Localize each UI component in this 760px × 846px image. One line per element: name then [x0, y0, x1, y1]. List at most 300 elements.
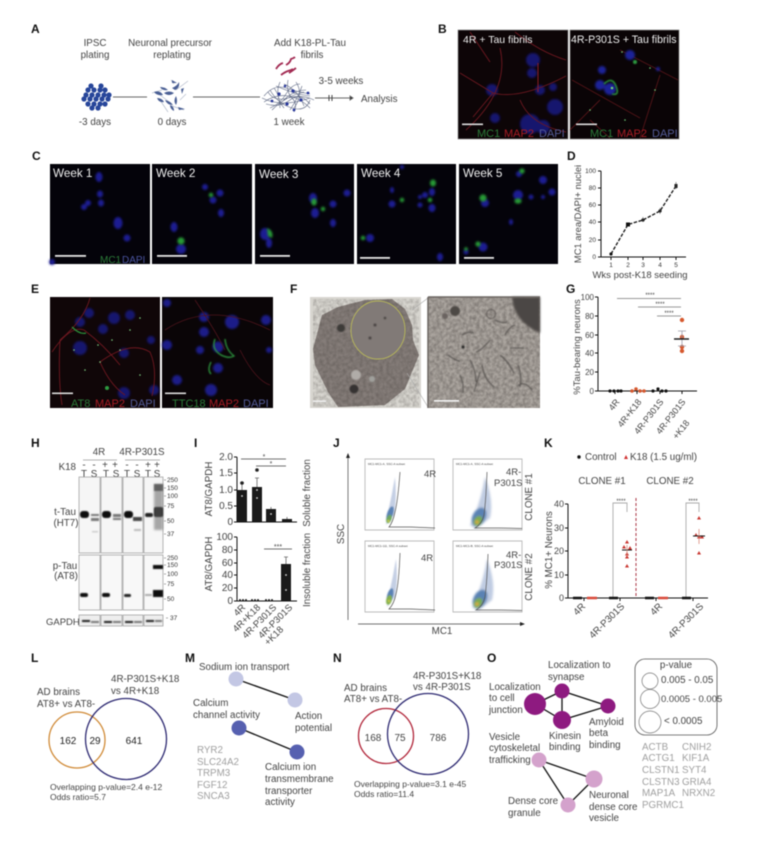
- chart: insoluble fraction: [204, 532, 313, 648]
- panel O: enrichment network and legend: [487, 651, 722, 824]
- label G: G: [566, 282, 575, 296]
- term labels: trafficking: [489, 755, 531, 766]
- caption: MAP2: [209, 398, 239, 410]
- caption: DAPI: [539, 128, 565, 140]
- gene list: CLSTN1: [642, 765, 680, 776]
- clone headings: CLONE #2: [646, 476, 694, 487]
- set labels: AD brains: [344, 683, 387, 694]
- blot header: +: [102, 460, 108, 471]
- micrograph: week 1: Week 1: [53, 167, 92, 180]
- term labels: Amyloid: [589, 717, 624, 728]
- micrograph: 4R-P301S + Tau fibrils: [570, 30, 679, 140]
- statistics: Odds ratio=5.7: [50, 792, 106, 802]
- caption: MC1: [477, 128, 500, 140]
- tick labels: [554, 499, 564, 603]
- tick labels: 100: [581, 293, 595, 302]
- blot: t-Tau (HT7): [53, 477, 163, 553]
- blot header: T: [81, 469, 87, 480]
- label C: C: [32, 149, 41, 163]
- axis titles: Wks post-K18 seeding: [592, 270, 688, 281]
- venn counts: 168: [365, 733, 382, 744]
- blot: GAPDH: [46, 615, 163, 628]
- gene list: SLC24A2: [197, 757, 239, 768]
- panel J: flow cytometry plots: [333, 436, 535, 637]
- category labels: 4R: [648, 601, 665, 618]
- chart: insoluble fraction: 60: [222, 558, 233, 569]
- tick labels: 80: [589, 185, 596, 192]
- molecular weight markers: 250: [167, 555, 178, 562]
- blot header: S: [134, 469, 141, 480]
- term labels: binding: [589, 740, 621, 751]
- flow plot: 4R clone 1: [365, 459, 436, 530]
- venn counts: [365, 733, 447, 744]
- term labels: Kinesin: [549, 731, 581, 742]
- molecular weight markers: 100: [167, 493, 178, 500]
- gene list: FGF12: [197, 780, 228, 791]
- gene list: [197, 745, 239, 802]
- label M: M: [185, 651, 195, 665]
- micrograph: week 1: MC1: [100, 255, 122, 266]
- step labels: Add K18-PL-Tau: [274, 38, 346, 49]
- chart: insoluble fraction: Insoluble fraction: [302, 533, 313, 607]
- panel F: electron micrographs: [290, 282, 540, 408]
- tick labels: 1: [609, 262, 613, 269]
- tick labels: 100: [585, 168, 596, 175]
- blot: p-Tau (AT8): p-Tau: [53, 561, 77, 572]
- term labels: channel activity: [193, 710, 260, 721]
- step labels: 1 week: [273, 117, 305, 128]
- blot header: [59, 447, 165, 480]
- clone headings: [578, 476, 694, 487]
- caption: MAP2: [95, 398, 125, 410]
- blot: p-Tau (AT8): [53, 555, 163, 610]
- venn counts: 786: [430, 733, 447, 744]
- flow plot: 4R clone 2: MC1-MC1-111, SSC-A subset: [368, 544, 408, 548]
- gene list: SNCA3: [197, 791, 230, 802]
- chart: soluble fraction: 1.0: [219, 485, 233, 496]
- caption: AT8: [71, 398, 90, 410]
- blot header: +: [112, 460, 118, 471]
- term labels: granule: [508, 808, 541, 819]
- blot header: K18: [59, 462, 77, 473]
- chart: insoluble fraction: 20: [222, 583, 233, 594]
- term labels: Action: [295, 711, 322, 722]
- blot header: +: [145, 460, 151, 471]
- panel I: AT8/GAPDH bar charts: [194, 436, 313, 648]
- significance brackets: ****: [616, 499, 626, 505]
- flow plot: 4R-P301S clone 1: MC1-MC1-A, SSC-A subset: [456, 462, 493, 466]
- electron micrograph: fibril detail: [428, 297, 540, 408]
- tick labels: 60: [585, 331, 595, 340]
- caption: [52, 392, 156, 410]
- caption: MAP2: [504, 128, 534, 140]
- label H: H: [31, 436, 40, 450]
- set labels: AT8+ vs AT8-: [344, 694, 402, 705]
- axis titles: MC1 area/DAPI+ nuclei: [572, 165, 583, 263]
- chart: insoluble fraction: 4R-P301S: [256, 602, 295, 641]
- blot header: T: [124, 469, 130, 480]
- tick labels: 0: [592, 254, 596, 261]
- blot header: T: [145, 469, 151, 480]
- label O: O: [487, 651, 496, 665]
- axis titles: [572, 165, 688, 281]
- legend: Control: [585, 452, 617, 463]
- chart: insoluble fraction: 100: [216, 532, 233, 543]
- molecular weight markers: 250: [167, 477, 178, 484]
- caption: TTC18: [172, 398, 206, 410]
- caption: MC1: [590, 128, 613, 140]
- caption: DAPI: [652, 128, 678, 140]
- micrograph: week 2: [152, 164, 252, 264]
- term labels: Calcium: [193, 698, 228, 709]
- network edges: [535, 691, 608, 805]
- step labels: [79, 38, 398, 128]
- axes: [565, 504, 708, 601]
- chart: soluble fraction: *: [263, 454, 266, 461]
- chart: insoluble fraction: 80: [222, 545, 233, 556]
- term labels: transporter: [265, 786, 313, 797]
- chart: insoluble fraction: 40: [222, 570, 233, 581]
- caption: DAPI: [130, 398, 156, 410]
- step labels: Neuronal precursor: [128, 38, 213, 49]
- chart: soluble fraction: [204, 452, 313, 528]
- tick labels: 40: [585, 349, 595, 358]
- term labels: [193, 662, 334, 808]
- molecular weight markers: 37: [167, 531, 175, 538]
- step labels: Analysis: [361, 94, 398, 105]
- molecular weight markers: 75: [167, 581, 175, 588]
- chart: insoluble fraction: +K18: [262, 624, 286, 648]
- gene list: MAP1A: [642, 788, 676, 799]
- flow plot: 4R-P301S clone 2: P301S: [494, 560, 523, 571]
- term labels: cytoskeletal: [489, 743, 540, 754]
- blot header: -: [92, 460, 96, 471]
- clone labels: CLONE #2: [524, 553, 535, 601]
- molecular weight markers: 37: [170, 615, 178, 622]
- term labels: Calcium ion: [265, 762, 316, 773]
- panel E: AT8 and TTC18 micrographs: [31, 282, 273, 410]
- gene list: [642, 742, 715, 811]
- panel C: time course micrographs: [32, 149, 558, 266]
- significance bars: ****: [664, 311, 674, 317]
- chart: insoluble fraction: 4R: [232, 602, 248, 619]
- blot header: 4R: [93, 447, 105, 458]
- label L: L: [31, 651, 38, 665]
- clone divider: [635, 498, 637, 598]
- p-value legend: [635, 659, 722, 735]
- micrograph: 4R + Tau fibrils: [458, 30, 568, 140]
- flow plot: 4R-P301S clone 2: [453, 541, 523, 612]
- micrograph: TTC18: [162, 297, 273, 410]
- chart: soluble fraction: 2.0: [219, 452, 233, 463]
- category labels: 4R-P301S: [666, 601, 706, 641]
- step labels: -3 days: [79, 117, 111, 128]
- molecular weight markers: 150: [167, 562, 178, 569]
- tick labels: [581, 293, 595, 396]
- set labels: vs 4R+K18: [111, 686, 160, 697]
- category labels: [607, 397, 692, 441]
- venn counts: [60, 736, 143, 747]
- micrograph: week 2: Week 2: [156, 167, 195, 180]
- tick labels: 3: [641, 262, 645, 269]
- set labels: 4R-P301S+K18: [111, 674, 180, 685]
- chart: soluble fraction: 1.5: [219, 468, 233, 479]
- icon: tau fibrils: [276, 57, 296, 75]
- network edges: [236, 679, 297, 752]
- axes: [598, 171, 686, 260]
- label A: A: [31, 22, 40, 36]
- gene list: CLSTN3: [642, 777, 680, 788]
- term labels: Dense core: [508, 796, 559, 807]
- blot: p-Tau (AT8): (AT8): [54, 571, 78, 582]
- flow plot: 4R-P301S clone 1: P301S: [494, 478, 523, 489]
- axes arrows and titles: [336, 453, 525, 637]
- statistics: [354, 779, 466, 799]
- micrograph: week 3: Week 3: [259, 168, 298, 181]
- data points: [573, 516, 705, 598]
- network nodes: purple cluster: [524, 684, 616, 729]
- blot header: S: [91, 469, 98, 480]
- molecular weight markers: 50: [167, 596, 175, 603]
- axes arrows and titles: SSC: [336, 524, 347, 544]
- term labels: vesicle: [589, 813, 619, 824]
- gene list: SYT4: [682, 765, 707, 776]
- tick labels: 4: [658, 262, 662, 269]
- panel B: tau fibril immunostaining: [438, 22, 679, 140]
- chart: insoluble fraction: 0: [227, 596, 233, 607]
- panel A: experimental timeline: [31, 22, 398, 128]
- molecular weight markers: 50: [167, 518, 175, 525]
- set labels: AD brains: [37, 687, 80, 698]
- icon: neuron network: [262, 80, 314, 112]
- axes: [595, 297, 697, 394]
- significance bars: ****: [645, 293, 655, 299]
- set labels: 4R-P301S+K18: [413, 671, 482, 682]
- chart: insoluble fraction: 4R-P301S: [240, 602, 279, 641]
- caption: 4R + Tau fibrils: [463, 34, 533, 46]
- statistics: Overlapping p-value=3.1 e-45: [354, 779, 466, 789]
- arrows between steps: [113, 95, 353, 101]
- panel L: Venn diagram: [31, 651, 180, 802]
- chart: soluble fraction: 0: [227, 517, 233, 528]
- gene list: ACTB: [642, 742, 669, 753]
- term labels: transmembrane: [265, 774, 334, 785]
- icon: neuronal precursor cells: [152, 80, 188, 112]
- blot header: T: [103, 469, 109, 480]
- term labels: activity: [265, 797, 295, 808]
- panel D: MC1 area line chart: [567, 149, 688, 281]
- label E: E: [31, 282, 39, 296]
- label J: J: [333, 436, 340, 450]
- molecular weight markers: [164, 477, 178, 622]
- tick labels: 0: [559, 593, 564, 603]
- gene list: CNIH2: [682, 742, 711, 753]
- gene list: RYR2: [197, 745, 223, 756]
- term labels: Vesicle: [489, 732, 521, 743]
- set labels: AT8+ vs AT8-: [37, 699, 95, 710]
- gene list: GRIA4: [682, 777, 712, 788]
- term labels: dense core: [589, 802, 638, 813]
- icon: iPSC cell cluster: [81, 83, 112, 111]
- label D: D: [567, 149, 576, 163]
- chart: insoluble fraction: AT8/GAPDH: [204, 537, 215, 591]
- tick labels: 10: [554, 570, 564, 580]
- molecular weight markers: 75: [167, 503, 175, 510]
- category labels: [571, 601, 706, 641]
- tick labels: [585, 168, 678, 269]
- blot header: -: [125, 460, 129, 471]
- flow plot: 4R-P301S clone 1: [453, 459, 523, 530]
- molecular weight markers: 100: [167, 571, 178, 578]
- micrograph: week 1: [49, 164, 150, 266]
- blot: GAPDH: GAPDH: [46, 617, 80, 628]
- micrograph: week 3: [255, 164, 354, 264]
- micrograph: week 5: [459, 164, 558, 264]
- category labels: 4R-P301S: [632, 397, 666, 436]
- gene list: PGRMC1: [642, 800, 684, 811]
- electron micrograph: whole cell: [310, 297, 421, 408]
- network nodes: pink cluster: [532, 752, 602, 812]
- venn counts: 641: [126, 736, 143, 747]
- statistics: [50, 782, 162, 802]
- flow plot: 4R clone 1: MC1-MC1-A, SSC-A subset: [368, 462, 405, 466]
- tick labels: 20: [585, 368, 595, 377]
- term labels: beta: [589, 728, 609, 739]
- blot header: -: [135, 460, 139, 471]
- significance brackets: ****: [688, 499, 698, 505]
- blot header: S: [154, 469, 161, 480]
- micrograph: week 5: Week 5: [463, 167, 503, 180]
- panel G: tau-bearing neurons scatter: [566, 282, 697, 441]
- venn circles: [49, 698, 166, 780]
- label N: N: [333, 651, 342, 665]
- gene list: ACTG1: [642, 753, 675, 764]
- micrograph: week 4: Week 4: [361, 167, 401, 180]
- tick labels: 40: [554, 499, 564, 509]
- legend: [577, 452, 697, 463]
- panel K: percent MC1 positive neurons: [544, 436, 708, 641]
- chart: soluble fraction: *: [270, 461, 273, 468]
- legend: K18 (1.5 ug/ml): [630, 452, 697, 463]
- flow plot: 4R clone 1: 4R: [424, 469, 436, 480]
- y axis title: % MC1+ Neurons: [544, 511, 555, 589]
- caption: [571, 34, 678, 140]
- network nodes: [228, 672, 304, 760]
- significance brackets: [613, 499, 699, 598]
- chart: insoluble fraction: ***: [274, 544, 282, 551]
- y axis title: %Tau-bearing neurons: [572, 299, 583, 395]
- category labels: 4R-P301S: [587, 601, 627, 641]
- blot: t-Tau (HT7): (HT7): [53, 518, 79, 529]
- flow plot: 4R-P301S clone 1: 4R-: [506, 467, 521, 478]
- label B: B: [438, 22, 447, 36]
- panel M: enrichment network: [185, 651, 334, 808]
- significance bars: ****: [655, 302, 665, 308]
- micrograph: week 4: [357, 164, 456, 264]
- tick labels: 0: [590, 387, 595, 396]
- tick labels: 40: [589, 219, 596, 226]
- tick labels: 30: [554, 523, 564, 533]
- axes arrows and titles: MC1: [432, 626, 452, 637]
- p-value legend: 0.005 - 0.05: [661, 675, 714, 686]
- chart: soluble fraction: 0.5: [219, 501, 233, 512]
- blot header: +: [154, 460, 160, 471]
- term labels: junction: [488, 705, 523, 716]
- blot header: S: [113, 469, 120, 480]
- step labels: 3-5 weeks: [319, 76, 363, 87]
- term labels: potential: [295, 723, 332, 734]
- term labels: synapse: [548, 672, 585, 683]
- set labels: [344, 671, 482, 705]
- term labels: [488, 660, 638, 824]
- p-value legend: p-value: [660, 660, 693, 671]
- clone labels: [524, 473, 535, 601]
- caption: 4R-P301S + Tau fibrils: [571, 34, 677, 46]
- term labels: Sodium ion transport: [199, 662, 290, 673]
- chart: soluble fraction: Soluble fraction: [302, 459, 313, 527]
- tick labels: 20: [589, 237, 596, 244]
- category labels: 4R: [571, 601, 588, 618]
- label F: F: [290, 282, 297, 296]
- flow plot: 4R clone 2: 4R: [421, 553, 433, 564]
- gene list: KIF1A: [682, 753, 710, 764]
- category labels: 4R-P301S: [654, 397, 688, 436]
- label I: I: [194, 436, 197, 450]
- significance bars: [617, 293, 681, 317]
- set labels: vs 4R-P301S: [413, 682, 471, 693]
- blot: t-Tau (HT7): t-Tau: [54, 507, 76, 518]
- flow plot: 4R-P301S clone 2: 4R-: [506, 550, 521, 561]
- micrograph: week 1: DAPI: [122, 255, 145, 266]
- molecular weight markers: 150: [167, 485, 178, 492]
- step labels: IPSC: [84, 38, 106, 49]
- data points: [608, 318, 689, 393]
- micrograph: AT8: [50, 297, 160, 410]
- step labels: 0 days: [158, 117, 187, 128]
- clone labels: CLONE #1: [524, 473, 535, 521]
- term labels: binding: [549, 742, 581, 753]
- statistics: Overlapping p-value=2.4 e-12: [50, 782, 162, 792]
- category labels: +K18: [671, 418, 692, 441]
- p-value legend: 0.0005 - 0.005: [661, 694, 722, 705]
- zoom connector lines: [407, 298, 428, 407]
- caption: DAPI: [243, 398, 269, 410]
- caption: MAP2: [617, 128, 647, 140]
- p-value legend: < 0.0005: [664, 716, 703, 727]
- clone headings: CLONE #1: [578, 476, 626, 487]
- blot header: -: [82, 460, 86, 471]
- set labels: [37, 674, 180, 710]
- gene list: TRPM3: [197, 768, 231, 779]
- venn circles: [358, 694, 468, 774]
- category labels: 4R+K18: [616, 397, 644, 429]
- panel N: Venn diagram: [333, 651, 482, 799]
- chart: soluble fraction: AT8/GAPDH: [204, 462, 215, 516]
- label K: K: [544, 436, 553, 450]
- caption: [165, 392, 269, 410]
- venn counts: 29: [89, 736, 101, 747]
- step labels: replating: [153, 50, 191, 61]
- step labels: plating: [81, 50, 109, 61]
- blot header: 4R-P301S: [119, 447, 165, 458]
- tick labels: 60: [589, 202, 596, 209]
- category labels: 4R: [607, 397, 622, 412]
- tick labels: 5: [674, 262, 678, 269]
- gene list: NRXN2: [682, 788, 715, 799]
- step labels: fibrils: [301, 50, 324, 61]
- chart: insoluble fraction: 4R+K18: [231, 602, 263, 635]
- venn counts: 75: [394, 733, 406, 744]
